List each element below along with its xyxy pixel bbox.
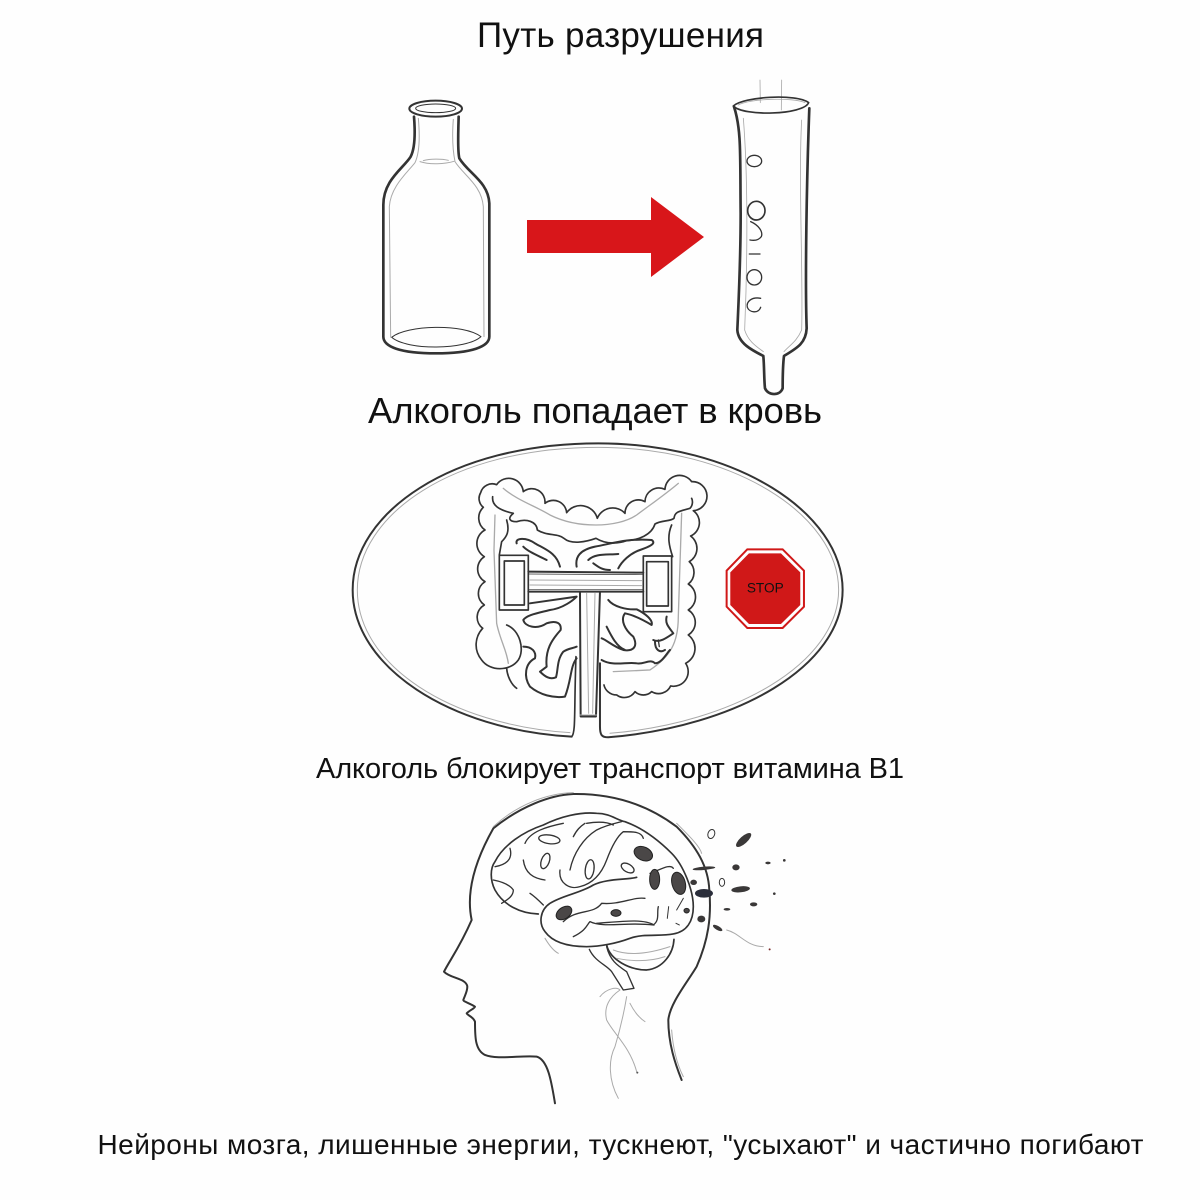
arrow [527,197,704,277]
intestine [476,475,707,698]
sulci [493,822,643,905]
icon: stop sign: STOP [747,581,784,596]
colon outer [477,475,707,698]
title: Путь разрушения [477,16,764,55]
dark spots [554,844,689,923]
head outline [444,794,710,1103]
particles [690,828,786,950]
inner grey lines [503,483,678,525]
colon inner [493,497,692,543]
panel: intestine oval [353,443,843,737]
brain outline [491,813,693,947]
T-shaped transporter [499,555,672,717]
nerve wisps [600,930,763,1098]
small intestine [516,539,653,570]
icon: bottle [383,101,489,353]
oval outline [353,443,843,737]
cecum [476,625,521,669]
icon: test tube [733,80,809,394]
heading: alcohol enters blood: Алкоголь попадает в кровь [368,390,822,431]
icon: head with brain [444,793,786,1103]
caption: neurons: Нейроны мозга, лишенные энергии, тускнеют, "усыхают" и частично погибают [98,1129,1144,1160]
caption: vitamin B1 blocked: Алкоголь блокирует транспорт витамина В1 [316,753,904,785]
cerebellum and brainstem [607,939,674,970]
open vacuoles [538,834,636,880]
icon: stop sign [727,549,804,628]
